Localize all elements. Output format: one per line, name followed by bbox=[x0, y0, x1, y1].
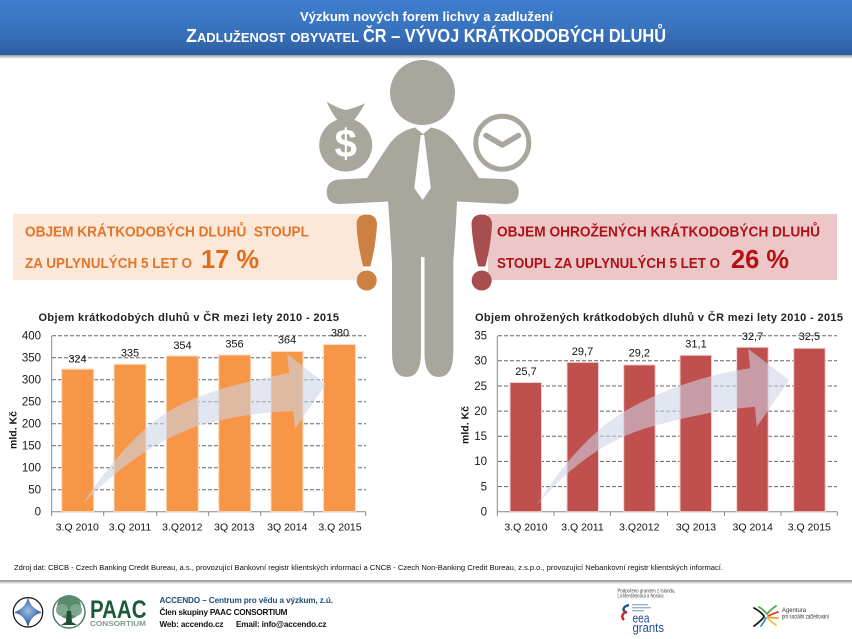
callout text: short-term debts up 17 %: 17 % bbox=[201, 244, 259, 274]
header title bbox=[186, 24, 666, 46]
logo: EEA grants: Lichtenštejnska a Norska bbox=[618, 594, 664, 600]
right chart y axis labels: 25 bbox=[474, 381, 487, 393]
logo: EEA grants: grants bbox=[632, 620, 664, 635]
callout: red box bbox=[488, 214, 837, 280]
icon: clock bbox=[476, 116, 529, 169]
source note: Zdroj dat: CBCB - Czech Banking Credit Bureau, a.s., provozující Bankovní registr klientských informací a CNCB - Czech Non-Banking Credit Bureau, z.s.p.o., provozující Nebankovní registr klientských informací. bbox=[14, 563, 723, 572]
right chart gridlines and axes bbox=[497, 336, 837, 516]
right chart category labels: 3.Q 2011 bbox=[561, 522, 604, 534]
logo: PAAC wordmark: PAAC bbox=[90, 596, 146, 624]
left chart y axis labels: 150 bbox=[22, 440, 41, 452]
header title: Zadluženost obyvatel bbox=[186, 26, 359, 46]
header banner bbox=[0, 0, 852, 59]
right chart value labels: 32,5 bbox=[799, 331, 820, 343]
footer contact text: Web: accendo.cz bbox=[160, 620, 224, 629]
left chart y axis title: mld. Kč bbox=[8, 411, 20, 449]
right chart y axis labels: 0 bbox=[481, 506, 487, 518]
left chart gridlines and axes bbox=[52, 336, 366, 516]
body bbox=[327, 128, 519, 377]
right chart trend arrow bbox=[537, 349, 789, 505]
right chart value labels: 32,7 bbox=[742, 331, 763, 343]
right chart y axis labels: 10 bbox=[474, 456, 487, 468]
right chart value labels: 25,7 bbox=[515, 366, 537, 378]
header title: ČR – VÝVOJ KRÁTKODOBÝCH DLUHŮ bbox=[363, 24, 666, 46]
callout text: endangered debts up 26 %: 26 % bbox=[731, 244, 789, 274]
callout text: short-term debts up 17 %: OBJEM KRÁTKODOBÝCH DLUHŮ STOUPL bbox=[25, 222, 309, 240]
left chart y axis labels: 250 bbox=[22, 396, 41, 408]
footer contact text bbox=[160, 596, 333, 629]
left chart category labels: 3.Q 2011 bbox=[109, 522, 151, 534]
right chart value labels: 29,7 bbox=[572, 346, 593, 358]
logo: Agentura pro sociální začleňování: Agentura bbox=[782, 608, 807, 614]
right chart category labels: 3.Q 2010 bbox=[504, 522, 548, 534]
right chart y axis labels: 35 bbox=[474, 330, 487, 342]
logo: Agentura pro sociální začleňování bbox=[754, 606, 829, 626]
icon: orange exclamation mark bbox=[356, 214, 377, 290]
right chart category labels bbox=[504, 522, 831, 534]
right chart category labels: 3.Q 2015 bbox=[788, 522, 831, 534]
right chart title: Objem ohrožených krátkodobých dluhů v ČR mezi lety 2010 - 2015 bbox=[475, 311, 843, 324]
logo: EEA grants: Podpořeno grantem z Islandu, bbox=[618, 588, 676, 594]
logo: PAAC tree bbox=[53, 595, 85, 628]
right chart y axis labels: 30 bbox=[474, 356, 487, 368]
right chart category labels: 3Q 2014 bbox=[733, 522, 773, 534]
left chart value labels: 380 bbox=[331, 328, 349, 340]
header subtitle: Výzkum nových forem lichvy a zadlužení bbox=[300, 9, 553, 24]
callout: orange box bbox=[13, 214, 363, 280]
footer contact text: Email: info@accendo.cz bbox=[236, 620, 326, 629]
left chart value labels: 354 bbox=[173, 340, 192, 352]
left chart y axis labels: 200 bbox=[22, 418, 41, 430]
left chart y axis labels: 50 bbox=[28, 484, 41, 496]
left chart y axis labels: 100 bbox=[22, 462, 41, 474]
left chart y axis labels: 300 bbox=[22, 374, 41, 386]
logo: Accendo emblem bbox=[13, 598, 43, 627]
right chart y axis title: mld. Kč bbox=[460, 406, 472, 444]
callout text: short-term debts up 17 % bbox=[25, 222, 309, 274]
right chart category labels: 3Q 2013 bbox=[676, 522, 716, 534]
person illustration bbox=[319, 60, 529, 377]
left chart value labels: 364 bbox=[278, 334, 296, 346]
footer contact text: ACCENDO – Centrum pro vědu a výzkum, z.ú. bbox=[160, 596, 333, 605]
logo: Agentura pro sociální začleňování: pro sociální začleňování bbox=[782, 614, 829, 620]
left chart category labels: 3.Q 2010 bbox=[56, 522, 99, 534]
left chart bars bbox=[62, 344, 355, 512]
tie bbox=[414, 135, 431, 200]
callout text: endangered debts up 26 %: OBJEM OHROŽENÝCH KRÁTKODOBÝCH DLUHŮ bbox=[497, 222, 820, 240]
left chart y axis labels: 400 bbox=[22, 330, 41, 342]
logo: EEA grants bbox=[618, 588, 676, 635]
right chart value labels: 31,1 bbox=[685, 339, 707, 351]
callout text: endangered debts up 26 % bbox=[497, 222, 820, 274]
right chart category labels: 3.Q2012 bbox=[619, 522, 660, 534]
left chart y axis labels: 350 bbox=[22, 352, 41, 364]
left chart bbox=[8, 311, 366, 534]
right chart y axis labels: 5 bbox=[481, 481, 487, 493]
right chart bars bbox=[510, 347, 825, 512]
right chart y axis labels bbox=[474, 330, 487, 518]
logo: EEA grants: eea bbox=[632, 610, 650, 626]
left chart title: Objem krátkodobých dluhů v ČR mezi lety 2010 - 2015 bbox=[38, 311, 339, 324]
right chart value labels: 29,2 bbox=[629, 348, 650, 360]
left chart category labels bbox=[56, 522, 362, 534]
logo: PAAC wordmark: CONSORTIUM bbox=[90, 619, 146, 628]
left chart category labels: 3Q 2013 bbox=[214, 522, 255, 534]
left chart y axis labels: 0 bbox=[35, 506, 41, 518]
left chart trend arrow bbox=[83, 354, 326, 504]
left chart category labels: 3.Q2012 bbox=[162, 522, 203, 534]
left chart value labels: 356 bbox=[225, 339, 244, 351]
icon: money bag: $ bbox=[335, 122, 357, 166]
left chart value labels bbox=[68, 328, 349, 365]
right chart bbox=[460, 311, 843, 534]
icon: red exclamation mark bbox=[472, 214, 492, 290]
left chart value labels: 335 bbox=[121, 348, 139, 360]
left chart y axis labels bbox=[22, 330, 41, 518]
right chart y axis labels: 20 bbox=[474, 406, 487, 418]
left chart value labels: 324 bbox=[68, 353, 87, 365]
right chart y axis labels: 15 bbox=[474, 431, 487, 443]
callout text: endangered debts up 26 %: STOUPL ZA UPLYNULÝCH 5 LET O bbox=[497, 254, 720, 272]
footer contact text: Člen skupiny PAAC CONSORTIUM bbox=[160, 606, 288, 617]
callout text: short-term debts up 17 %: ZA UPLYNULÝCH 5 LET O bbox=[25, 254, 192, 272]
right chart value labels bbox=[515, 331, 820, 378]
head bbox=[390, 60, 455, 125]
left chart category labels: 3.Q 2015 bbox=[318, 522, 362, 534]
left chart category labels: 3Q 2014 bbox=[267, 522, 308, 534]
icon: money bag bbox=[319, 102, 372, 172]
